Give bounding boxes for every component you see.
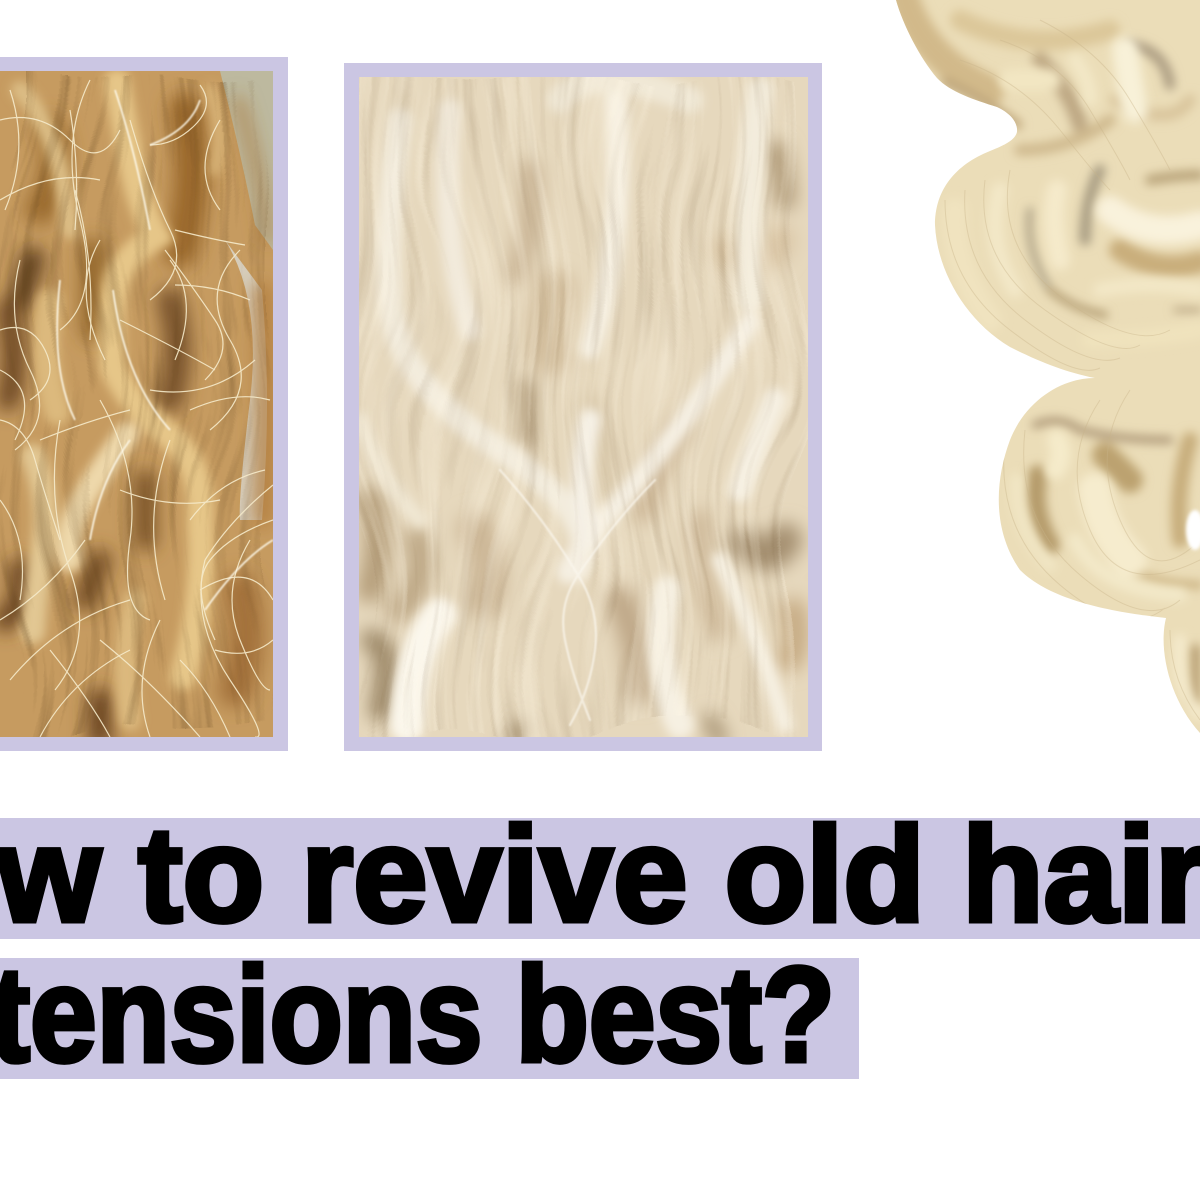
panel: damaged hair photo xyxy=(0,57,288,751)
damaged hair image xyxy=(0,71,273,737)
title highlight bars xyxy=(0,818,1200,1079)
healthy hair image xyxy=(359,77,808,740)
panel frame xyxy=(344,63,822,751)
panel frame xyxy=(0,57,288,751)
title banner xyxy=(0,799,1200,1090)
gap between curls xyxy=(1186,510,1200,550)
panel: healthy hair photo xyxy=(344,63,822,751)
icon: wavy blonde hair extension xyxy=(880,0,1200,740)
